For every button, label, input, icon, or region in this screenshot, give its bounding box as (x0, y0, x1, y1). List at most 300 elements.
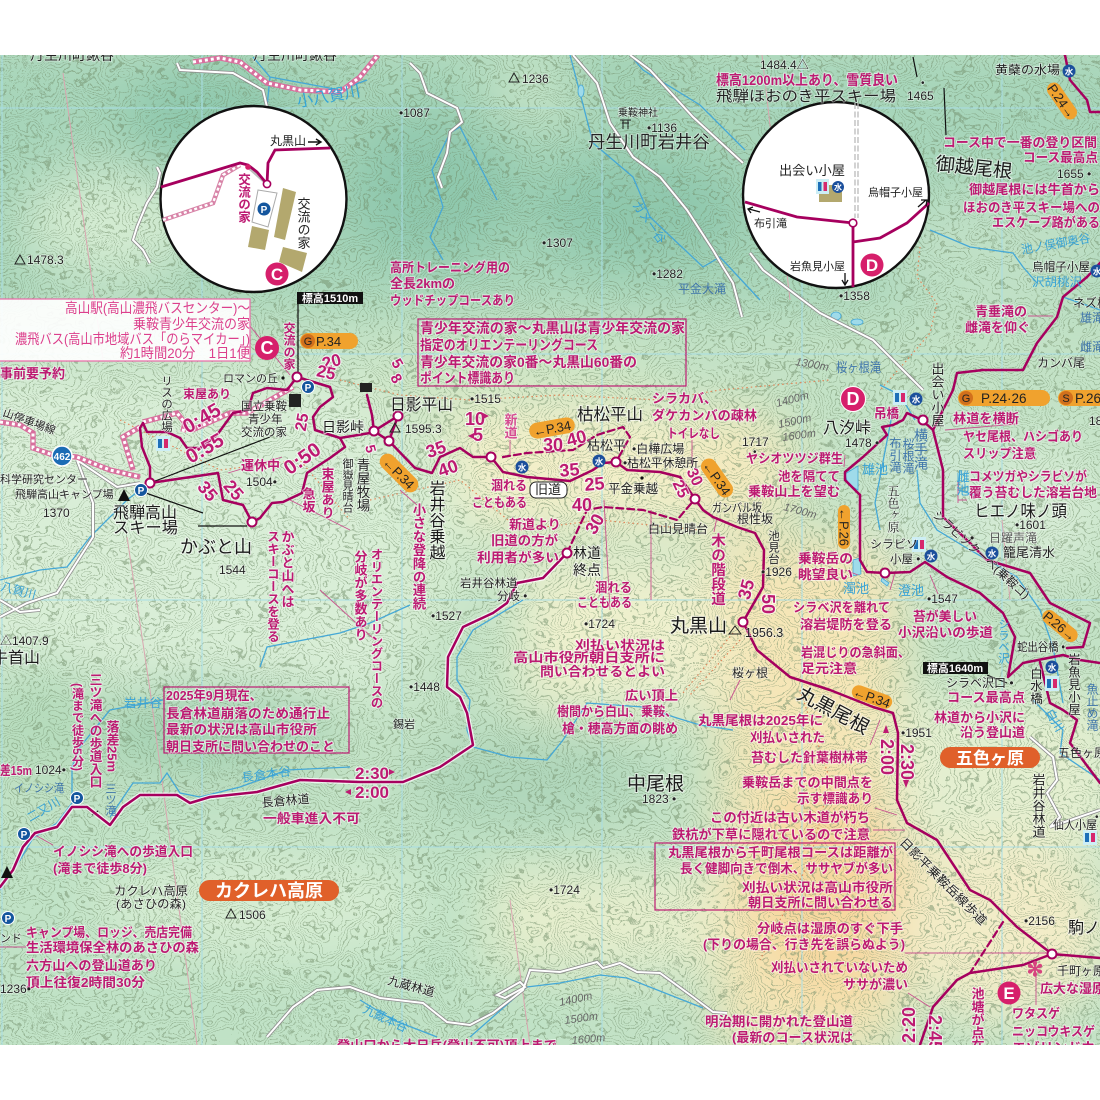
left place names: ロマンの丘 (223, 372, 278, 385)
五色ヶ原 area names and notes: 雄池 (862, 462, 888, 477)
trail notes: lower right: ササが濃い (843, 977, 908, 992)
vertical trail notes: left: 新道 (502, 412, 518, 439)
course time labels: 35 (193, 477, 222, 505)
top map names: •1136 (647, 121, 677, 135)
course time labels: 2:00 (877, 739, 897, 775)
elevation labels: 1500m (564, 1010, 599, 1027)
course time labels: 50 (758, 594, 778, 614)
road name: 日影平乗鞍岳線歩道: 日影平乗鞍岳線歩道 (897, 835, 990, 928)
note: wood chip course (390, 260, 515, 308)
left place names: リスの広場 (160, 375, 173, 433)
label pill: 五色ヶ原 (940, 747, 1040, 768)
badge E: E (1003, 984, 1015, 1003)
course time labels: 2:30 (355, 764, 389, 783)
inset map C: 交流の家 (296, 197, 310, 249)
central place names: 日影平山 (390, 396, 453, 414)
central place names: •1515 (470, 392, 501, 406)
course time labels: 30 (683, 465, 706, 489)
inset map C: 丸黒山 (270, 134, 306, 148)
route 462 badge: 462 (54, 452, 71, 463)
course time labels: 25 (293, 412, 313, 432)
top map names: 丹生川町鍬谷 (253, 47, 337, 63)
left place names: 青少年 (248, 412, 282, 426)
千町ヶ原 area: ワタスゲ (1012, 1006, 1060, 1021)
inset map D: 布引滝 (754, 216, 787, 230)
course time labels: 2:00 (355, 783, 389, 802)
trail notes: lower right: •1951 (901, 726, 932, 740)
五色ヶ原 area names and notes: 1717 (742, 435, 769, 449)
lower-left notes and names: 1024• (35, 763, 66, 777)
right top notes: 1655 • (1057, 167, 1091, 181)
trail notes: center: 樹間から白山、乗鞍、 (557, 704, 677, 719)
trail notes: center: 新道より (509, 517, 561, 532)
lower-left notes and names: (滝まで徒歩8分) (53, 861, 147, 876)
inset map C: C (271, 265, 283, 284)
central place names: 1595.3 (405, 422, 442, 436)
五色ヶ原 area names and notes: 雌池 (954, 470, 970, 496)
central place names: 1823 • (642, 792, 676, 806)
icons: toilets (156, 390, 1097, 845)
course time labels: 20 (320, 350, 343, 373)
central place names: 枯松平 (587, 438, 626, 453)
vertical trail notes: left: 束屋あり (320, 466, 334, 519)
五色ヶ原 area names and notes: 眺望良い (798, 567, 853, 582)
top map names: •1358 (839, 289, 870, 303)
central place names: ガンバル坂 (712, 501, 762, 515)
五色ヶ原 area names and notes: 池見台 (767, 530, 780, 565)
course time labels: 35 (559, 459, 580, 481)
lower-left notes and names: イノシシ滝 (14, 782, 64, 795)
left place names: 1504• (246, 475, 277, 489)
course time labels: 10 (465, 409, 485, 429)
五色ヶ原 area names and notes: 沿う登山道 (960, 725, 1025, 740)
course time labels: 5 (473, 425, 483, 445)
vertical trail notes: left: 岩井谷乗越 (426, 480, 446, 560)
vertical trail notes: left: 運休中 (241, 458, 280, 473)
callout: orienteering box: 青少年交流の家～丸黒山は青少年交流の家 (420, 320, 685, 336)
page reference G P.34: P.34 (316, 334, 341, 349)
千町ヶ原 area: ニッコウキスゲ (1012, 1024, 1095, 1039)
trail notes: center: 問い合わせるとよい (540, 664, 665, 679)
五色ヶ原 area names and notes: 溶岩堤防を登る (800, 617, 892, 632)
left place names: 1544 (219, 563, 246, 577)
note: advance reservation: 事前要予約 (0, 366, 65, 381)
old path tag: 旧道 (535, 482, 561, 497)
五色ヶ原 area names and notes: 魚止め滝 (1085, 683, 1099, 731)
elevation tag 1510m: 標高1510m (302, 291, 358, 305)
left place names: △1407.9 (0, 634, 49, 648)
central place names: 錫岩 (393, 717, 415, 731)
central place names: •1448 (409, 680, 440, 694)
五色ヶ原 area names and notes: 籠尾清水 (1003, 545, 1055, 560)
五色ヶ原 area names and notes: シラビソ (870, 538, 918, 551)
page reference pills: G (962, 393, 970, 405)
五色ヶ原 area names and notes: シラビソクーペ(乗鞍ゴ) (930, 507, 1033, 602)
left place names: 飛騨高山キャンプ場 (15, 487, 114, 501)
inset map C: P (261, 205, 268, 216)
central place names: •1724 (584, 617, 615, 631)
page reference pills: ←P.34 (700, 458, 734, 498)
top map names: 丹生川町岩井谷 (588, 132, 710, 152)
elevation labels: 1600m (782, 427, 817, 444)
page reference pills: ←P.34 (380, 455, 417, 492)
五色ヶ原 area names and notes: 岩魚見小屋 (1066, 652, 1080, 716)
top map names: 標高1200m以上あり、雪質良い (716, 72, 898, 88)
trail notes: center: こともある (577, 595, 632, 610)
五色ヶ原 area names and notes: 八汐峠 (823, 419, 871, 437)
icon: camp tents (1, 489, 130, 878)
千町ヶ原 area (970, 914, 1100, 1055)
central place names: 桜ヶ根 (732, 666, 768, 680)
central place names: 分岐 • (497, 590, 527, 603)
callout: orienteering box: 青少年交流の家0番～丸黒山60番の (420, 354, 637, 370)
central place names (390, 392, 783, 897)
五色ヶ原 area names and notes: シラベ沢 (997, 618, 1010, 665)
course time labels: 2:30 (897, 744, 917, 780)
page reference pills: P.24·26 (981, 391, 1027, 406)
course time labels: 0:45 (179, 399, 225, 438)
vertical trail notes: left: 急坂 (300, 486, 316, 514)
elevation labels: 1400m (558, 990, 594, 1009)
五色ヶ原 area names and notes: 白川 (1042, 706, 1067, 734)
note: wood chip course: ウッドチップコースあり (390, 293, 515, 308)
lower-left notes and names: 二又川 (24, 794, 63, 825)
五色ヶ原 area names and notes: 桜根滝 (901, 438, 915, 474)
right top notes: カンバ尾 (1037, 356, 1085, 370)
left place names: 山停車場線 (1, 405, 58, 437)
top map names: 八賀川 (0, 579, 38, 602)
inset map C: 交流の家 (236, 173, 250, 223)
page reference pills: P.26→ (1040, 608, 1079, 644)
course time labels: 40 (435, 456, 461, 481)
trail notes: center: ダケカンバの疎林 (652, 408, 757, 423)
trail notes: lower right: 刈払いされた (750, 730, 825, 745)
五色ヶ原 area names and notes: 乗鞍山上を望む (748, 484, 840, 499)
callout: bus access box: 乗鞍青少年交流の家 (133, 316, 250, 332)
top map names: 平金大滝 (678, 282, 726, 296)
千町ヶ原 area: ✻ (1027, 959, 1043, 981)
right top notes: 雌滝を仰ぐ (965, 320, 1030, 335)
page reference pills (376, 80, 1100, 712)
trail notes: center: 刈払い状況は (575, 638, 665, 653)
五色ヶ原 area names and notes: シラベ沢を離れて (793, 600, 890, 615)
top map names: 乗鞍神社 (618, 106, 658, 119)
五色ヶ原 area names and notes: ヤセ尾根、ハシゴあり (963, 429, 1083, 444)
五色ヶ原 area names and notes: 小屋 • (890, 553, 920, 566)
五色ヶ原 area names and notes: ヤシオツツジ群生 (746, 451, 843, 466)
page reference pills: ←P.26 (836, 508, 852, 546)
page reference pills: P.24→ (1045, 81, 1079, 121)
left place names: 日影峠 (322, 419, 364, 435)
lower-left notes and names: キャンプ場、ロッジ、売店完備 (26, 925, 192, 940)
note: wood chip course: 全長2kmの (390, 276, 455, 291)
vertical trail notes: left: 小さな登降の連続 (410, 503, 426, 612)
left place names: 1478.3 (27, 253, 64, 267)
callout: road closure box: 朝日支所に問い合わせのこと (166, 739, 335, 754)
trail notes: center: トイレなし (667, 426, 720, 441)
icons: water (516, 64, 1100, 674)
icon labels P: P (21, 830, 28, 841)
course time labels: 5 (362, 443, 380, 455)
right top notes: 烏帽子小屋 (1032, 259, 1090, 274)
callout: 千町尾根 course box (655, 843, 895, 910)
top map names: 1236 (522, 72, 549, 86)
lower-left notes and names: 登山口から大日岳(登山不可)頂上まで (337, 1038, 557, 1053)
trail notes: center: こともある (472, 495, 527, 510)
icons: water: 水 (1048, 662, 1057, 672)
right top notes: 沢胡桃沢 (1032, 274, 1082, 289)
callout: orienteering box: 指定のオリエンテーリングコース (420, 337, 598, 353)
五色ヶ原 area names and notes: • (970, 531, 974, 545)
vertical note 交流の家: 交流の家 (282, 322, 296, 370)
old path tag (530, 482, 567, 498)
lower-left notes and names: 生活環境保全林のあさひの森 (26, 940, 199, 955)
label pill: カクレハ高原: カクレハ高原 (215, 881, 323, 901)
course time labels: 35 (734, 577, 758, 602)
top map names: •1307 (542, 236, 573, 250)
course time labels: 25 (315, 361, 337, 384)
elevation labels: 1300m (794, 356, 830, 374)
inset map D: 水 (834, 182, 842, 192)
lower-left notes and names: 九蔵林道 (386, 973, 436, 999)
top map names: 丹生川町鍬谷 (30, 47, 114, 63)
course time labels: 0:55 (182, 429, 228, 468)
lower-left notes and names: 一般車進入不可 (263, 811, 360, 826)
lower-left notes and names: 1506 (239, 908, 266, 922)
icon labels P: P (305, 383, 312, 394)
trail notes: center: 槍・穂高方面の眺め (562, 721, 678, 736)
inset map D: D (866, 256, 878, 275)
course time labels: 2:45 (925, 1015, 945, 1051)
left place names: 御嶽見晴台 (341, 457, 354, 514)
callout: bus access box: 約1時間20分 1日1便 (120, 345, 250, 361)
central place names: 枯松平山 (577, 405, 643, 424)
五色ヶ原 area names and notes: 濁池 (843, 581, 869, 596)
trail notes: center: 涸れる (595, 580, 632, 595)
page reference G P.34 (300, 333, 358, 349)
right top notes: 出会い小屋 (930, 362, 944, 428)
五色ヶ原 area names and notes: 苔が美しい (913, 609, 977, 624)
inset map D: 出会い小屋 (779, 163, 845, 178)
lower-left notes and names (0, 673, 557, 1053)
top map names: 黄蘖の水場 (995, 62, 1060, 77)
elevation labels: 1700m (782, 501, 818, 522)
五色ヶ原 area names and notes: スリップ注意 (963, 446, 1036, 461)
inset map D: 烏帽子小屋 (868, 185, 923, 199)
course time labels: 0:50 (280, 439, 325, 480)
trail notes: center: 広い頂上 (625, 688, 678, 703)
五色ヶ原 area names and notes: 池を隔てて (778, 469, 840, 484)
callout: road closure box: 2025年9月現在、 (166, 688, 262, 703)
五色ヶ原 area names and notes: ヒエノ味ノ頭 (974, 502, 1067, 521)
lower-left notes and names: イノシシ滝への歩道入口 (53, 844, 193, 859)
五色ヶ原 area names and notes: • (1095, 812, 1099, 823)
top map names: 1484.4△ (760, 58, 809, 72)
left place names: 交流の家 (241, 425, 287, 439)
五色ヶ原 area names and notes: 林道から小沢に (934, 710, 1025, 725)
central place names: •白樺広場 (632, 441, 684, 456)
trail notes: center: シラカバ、 (652, 391, 717, 406)
lower-left notes and names: カクレハ高原 (114, 884, 188, 898)
callout: road closure box: 最新の状況は高山市役所 (166, 722, 317, 737)
central place names: 根性坂 (737, 512, 773, 526)
badge D: D (846, 389, 860, 409)
dotted trails (120, 247, 937, 960)
trail notes: lower right: 丸黒尾根は2025年に (698, 713, 823, 728)
right top notes: 御越尾根には牛首から (969, 182, 1100, 197)
course time labels (179, 350, 945, 1051)
left place names: 飛騨高山 (113, 504, 177, 522)
top map names (0, 47, 1060, 602)
lower-left notes and names: ンド (0, 933, 22, 945)
icon labels P: P (5, 914, 12, 925)
route junction nodes (146, 372, 1056, 958)
paved road dashed pink (0, 55, 378, 477)
central place names: 岩井谷林道 (460, 576, 518, 590)
left place names (0, 253, 370, 667)
五色ヶ原 area names and notes: •1601 (1015, 518, 1046, 532)
icon labels P: P (138, 486, 145, 497)
left place names: 国立乗鞍 (241, 399, 287, 413)
right top notes: 池ノ俣御奥谷 (1020, 230, 1091, 257)
lower-left notes and names: (あさひの森) (116, 896, 186, 911)
course time labels: 40 (572, 495, 592, 515)
千町ヶ原 area: 池塘が点在 (970, 987, 984, 1052)
badge C (255, 336, 279, 360)
lower-left notes and names: 六方山への登山道あり (26, 958, 157, 973)
vertical trail notes: left: スキーコースを登る (265, 530, 279, 642)
vertical trail notes: left: オリエンテーリングコースの (369, 548, 383, 709)
lower-left notes and names: 長倉本谷 (240, 764, 292, 785)
五色ヶ原 area names and notes: • (753, 447, 757, 458)
left place names: かぶと山 (180, 537, 252, 557)
badge C: C (260, 338, 274, 358)
vertical trail notes: left: 分岐が多数あり (352, 550, 368, 641)
五色ヶ原 area names and notes: 布引滝 (888, 437, 902, 473)
callout: orienteering box: ポイント標識あり (420, 370, 515, 386)
五色ヶ原 area names and notes: 乗鞍岳の (798, 551, 853, 566)
千町ヶ原 area: •2156 (1024, 914, 1055, 928)
五色ヶ原 area names and notes: 小沢沿いの歩道 (898, 625, 993, 640)
五色ヶ原 area names and notes: 足元注意 (801, 661, 857, 676)
course time labels: 25 (669, 477, 692, 501)
icon labels P: P (74, 794, 81, 805)
badge D (840, 386, 866, 412)
right top notes: 御越尾根 (934, 153, 1013, 183)
left place names: 1370 (43, 506, 70, 520)
thin leader lines (0, 316, 1053, 1007)
central place names: 中尾根 (627, 773, 684, 795)
course time labels: 5 (387, 356, 406, 372)
五色ヶ原 area names and notes: 岩混じりの急斜面、 (801, 645, 910, 660)
course time labels: 30 (543, 435, 563, 455)
course time labels: 2:20 (899, 1007, 919, 1043)
callout: orienteering box (418, 319, 686, 386)
central place names: 1956.3 (745, 626, 783, 640)
五色ヶ原 area names and notes: 1478 • (845, 436, 879, 450)
vertical trail notes: left: かぶと山へは (280, 530, 294, 608)
callout: road closure box: 長倉林道崩落のため通行止 (166, 706, 330, 721)
五色ヶ原 area names and notes: 白水橋 (1028, 666, 1042, 705)
lower-left notes and names: 差15m (0, 763, 32, 778)
top map names: ガメー谷 (630, 199, 669, 246)
trail notes: lower right: 鉄杭が下草に隠れているので注意 (672, 827, 870, 842)
trail notes: center: 利用者が多い (477, 550, 559, 565)
callout: 千町尾根 course box: 刈払い状況は高山市役所 (742, 880, 893, 895)
central place names: 丸黒山 (670, 615, 727, 637)
五色ヶ原 area names and notes: 仙人小屋 (1053, 818, 1097, 832)
千町ヶ原 area: エゾリンドウ (1012, 1040, 1095, 1055)
inset map C (160, 106, 346, 292)
trail notes: lower right: 分岐点は湿原のすぐ下手 (757, 921, 903, 936)
top map names: • (921, 78, 925, 89)
icons: parking (2, 380, 314, 924)
elevation labels (558, 356, 830, 1047)
course time labels: 30 (581, 510, 608, 538)
icons: water: 水 (518, 462, 527, 472)
course time labels: 40 (564, 426, 589, 450)
badge E (998, 982, 1020, 1004)
top map names: •1087 (399, 106, 430, 120)
icon labels P (5, 383, 312, 925)
inset map D (743, 102, 929, 288)
trail notes: center: 木の階段道 (709, 533, 725, 606)
trail notes: lower right (672, 713, 932, 1045)
central place names: 白山見晴台 (648, 521, 708, 536)
right top notes: 青垂滝の (975, 304, 1027, 319)
central place names: •1724 (549, 883, 580, 897)
elevation labels: 1500m (777, 412, 813, 431)
central place names: •1527 (431, 609, 462, 623)
lower-left notes and names: 長倉林道 (261, 792, 310, 810)
top map names: 1465 (907, 89, 934, 103)
trail notes: center: 涸れる (491, 478, 527, 493)
trail notes: lower right: この付近は古い木道が朽ち (710, 810, 870, 825)
course time labels: 25 (219, 476, 248, 504)
callout: bus access box (0, 299, 250, 361)
elevation labels: 1600m (571, 1032, 606, 1047)
callout: bus access box: 高山駅(高山濃飛バスセンター)～ (65, 300, 250, 316)
五色ヶ原 area names and notes: 横手滝 (913, 428, 929, 470)
icons: huts (289, 383, 372, 407)
trail notes: lower right: 苔むした針葉樹林帯 (751, 750, 868, 765)
五色ヶ原 area names and notes: •1547 (927, 592, 958, 606)
page reference pills: ←P.34 (532, 418, 572, 439)
course time labels: 35 (423, 437, 449, 462)
vertical trail notes: left (183, 386, 518, 709)
right top notes (836, 135, 1100, 428)
trail notes: lower right: (下りの場合、行き先を誤らぬよう) (703, 937, 905, 952)
五色ヶ原 area names and notes: 澄池 (898, 583, 924, 598)
五色ヶ原 area names and notes: 林道を横断 (953, 411, 1019, 426)
lower-left notes and names: 岩井谷 (124, 695, 162, 710)
central place names: 終点 (573, 562, 601, 578)
ridge name: 丸黒尾根: 丸黒尾根 (794, 683, 873, 739)
left place names: スキー場 (113, 519, 178, 537)
top map names: 飛騨ほおのき平スキー場 (716, 88, 896, 105)
right top notes: 桜ヶ根滝 (836, 360, 881, 375)
top map names: •1282 (652, 267, 683, 281)
五色ヶ原 area names and notes: 蛇出谷橋 • (1017, 640, 1065, 654)
left place names: 青屋牧場 (354, 458, 370, 512)
五色ヶ原 area names and notes (742, 406, 1100, 839)
lower-left notes and names: 頂上往復2時間30分 (26, 975, 145, 990)
icons: water: 水 (1065, 66, 1074, 76)
icons: water: 水 (912, 394, 921, 404)
callout: 千町尾根 course box: 丸黒尾根から千町尾根コースは距離が (668, 845, 893, 860)
trail notes: center: 旧道の方が (491, 533, 558, 548)
left place names: 科学研究センター (0, 472, 88, 486)
